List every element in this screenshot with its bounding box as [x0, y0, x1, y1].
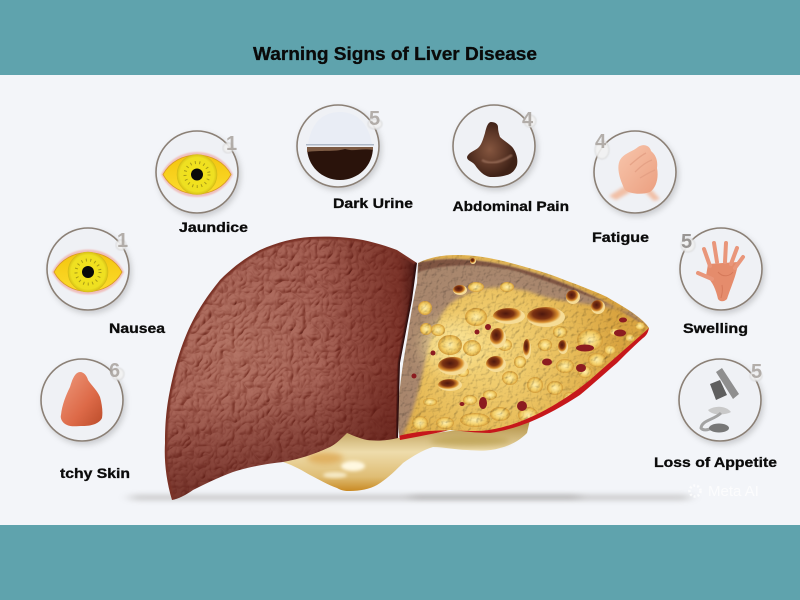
number badge: 4	[522, 109, 534, 131]
texture grain	[398, 255, 649, 435]
label: Loss of Appetite: Loss of Appetite	[654, 454, 777, 470]
icon: Abdominal Pain	[453, 105, 536, 187]
icon: Itchy Skin	[41, 359, 124, 441]
icon: Nausea	[47, 228, 129, 310]
rim line	[306, 144, 374, 146]
cavities	[438, 258, 605, 391]
label: Swelling: Swelling	[683, 320, 748, 336]
forearms	[609, 184, 660, 201]
organ shape	[467, 122, 517, 177]
number badge: 1	[117, 230, 128, 252]
number badge: 5	[751, 361, 762, 383]
microscope	[701, 368, 739, 432]
number badge: 6	[109, 360, 120, 382]
skin shape	[61, 372, 102, 426]
knuckles	[630, 153, 655, 178]
title: Warning Signs of Liver Disease	[253, 44, 537, 64]
bile pool under liver	[283, 420, 530, 491]
number badge: 4	[595, 131, 607, 153]
background panel	[0, 75, 800, 525]
icon: Dark Urine	[297, 105, 382, 187]
watermark: Meta AI	[708, 483, 759, 500]
icon: Fatigue	[594, 131, 676, 213]
number badge: 1	[226, 133, 237, 155]
hand	[698, 243, 743, 301]
fat globules	[412, 282, 645, 430]
liver illustration	[160, 232, 655, 504]
bottom band	[0, 525, 800, 600]
eye	[161, 152, 233, 197]
red rim	[398, 328, 649, 442]
number badge: 5	[369, 108, 380, 130]
ground shadow	[130, 494, 690, 501]
icon: Swelling	[680, 228, 762, 310]
dark liquid	[307, 147, 373, 180]
label: Itchy Skin: tchy Skin	[60, 465, 130, 481]
label: Nausea: Nausea	[109, 320, 165, 336]
top band	[0, 0, 800, 75]
fist	[618, 145, 658, 194]
label: Abdominal Pain: Abdominal Pain	[452, 198, 569, 214]
right lobe: fatty diseased tissue	[398, 255, 649, 440]
label: Fatigue: Fatigue	[592, 229, 649, 245]
highlight	[482, 155, 512, 163]
icon: Jaundice	[156, 131, 238, 213]
icon: Loss of Appetite	[679, 359, 762, 441]
red spots	[412, 318, 627, 411]
label: Jaundice: Jaundice	[179, 219, 248, 235]
label: Dark Urine: Dark Urine	[333, 195, 413, 211]
left lobe: textured liver	[160, 232, 422, 504]
liquid surface	[307, 147, 373, 152]
eye	[52, 250, 124, 294]
number badge: 5	[681, 231, 692, 253]
cup upper	[308, 112, 372, 144]
